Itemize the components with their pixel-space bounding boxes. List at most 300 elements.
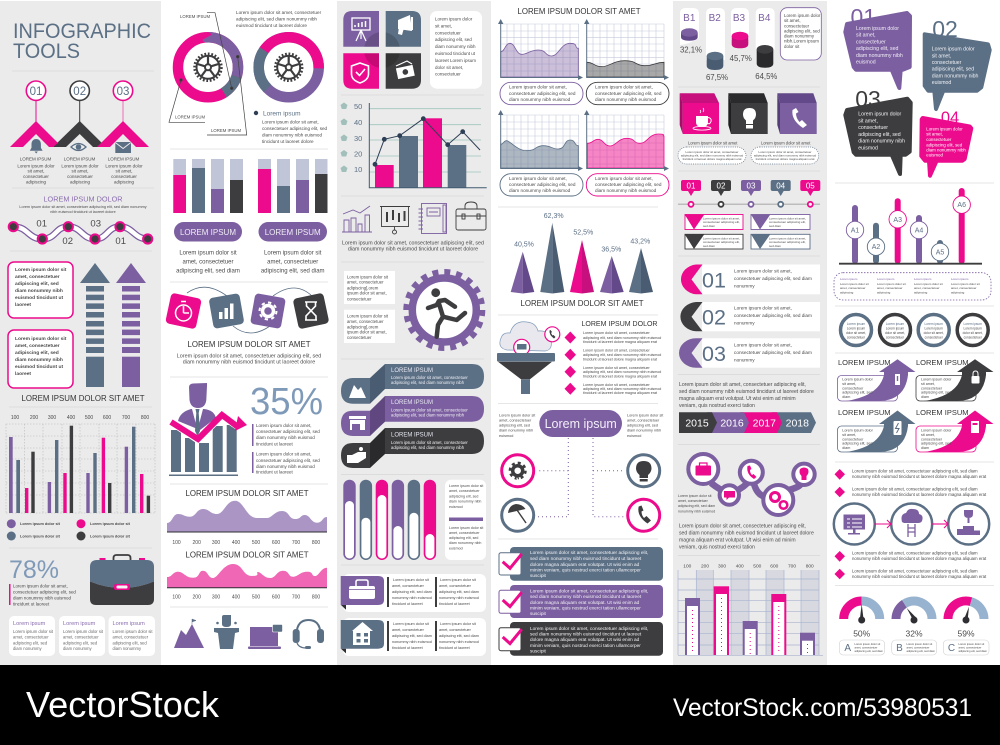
text card: euismod tincidunt ut bbox=[435, 51, 476, 56]
speech bubble 02: sit amet, bbox=[932, 53, 951, 59]
panel: column 2 bbox=[165, 10, 331, 649]
info cards: adipiscing elit, sed bbox=[13, 640, 48, 646]
heading and caption: LOREM IPSUM DOLOR SIT AMET bbox=[188, 340, 311, 349]
cube: bulb bbox=[728, 93, 768, 134]
caption: Lorem ipsum dolor sit amet, consectetuer adipiscing elit, sed bbox=[342, 240, 484, 246]
icon: cloud funnel bbox=[497, 322, 560, 394]
icon circle: bulb bbox=[628, 455, 660, 487]
slider chart: A4 bbox=[915, 228, 923, 234]
text block: veniam, quis nostrud exerci tation bbox=[679, 544, 755, 550]
text rings: consectetuer bbox=[886, 336, 905, 340]
text card: dolor sit amet, bbox=[435, 65, 463, 70]
gauge card C bbox=[943, 640, 989, 655]
funnel list: adipiscing elit, sed diam nonummy nibh euismod bbox=[583, 336, 661, 340]
funnel list: tincidunt ut laoreet dolore magna aliquam erat bbox=[583, 340, 657, 344]
speech bubble 02: Lorem ipsum dolor bbox=[932, 47, 975, 53]
top text block: adipiscing elit, sed diam nonummy nibh bbox=[236, 16, 317, 22]
pyramid chart: 43,2% bbox=[630, 238, 650, 246]
icon circle: umbrella bbox=[502, 499, 534, 531]
bar chart: 100 bbox=[11, 415, 19, 421]
check item: purple bbox=[499, 585, 663, 618]
process flow bbox=[834, 504, 989, 544]
info cards: Lorem ipsum bbox=[112, 621, 145, 627]
caption: diam nonummy nibh euismod tincidunt ut laoreet dolore bbox=[348, 246, 478, 252]
step captions: adipiscing bbox=[114, 179, 135, 184]
combo chart bbox=[340, 102, 487, 188]
tab card: house: adipiscing elit, sed diam bbox=[439, 634, 479, 638]
text card: laoreet Lorem ipsum bbox=[435, 58, 476, 63]
pyramid chart bbox=[511, 213, 653, 294]
column chart on grid: 200 bbox=[701, 564, 709, 570]
info cards: amet, consectetuer bbox=[13, 634, 49, 640]
check item: purple: suscipit bbox=[530, 611, 547, 617]
speech bubble 03: adipiscing elit, sed bbox=[858, 132, 901, 138]
icon: outline briefcase bbox=[456, 202, 486, 230]
callout box 1: adipiscing elit, sed bbox=[15, 281, 59, 287]
chevron item 02: Lorem ipsum dolor sit amet, bbox=[734, 306, 792, 311]
grid chart: pink bbox=[584, 110, 669, 171]
area chart 2: 800 bbox=[312, 594, 320, 600]
area chart 1: 200 bbox=[193, 540, 201, 546]
diamond bullets bottom bbox=[834, 550, 987, 579]
callout box 2: amet, consectetuer bbox=[15, 343, 60, 349]
text card: Lorem ipsum dolor bbox=[435, 16, 473, 22]
vertical pill gauges bbox=[343, 480, 436, 560]
diamond bullets bottom: Lorem ipsum dolor sit amet, consectetuer adipiscing elit, sed diam bbox=[852, 568, 978, 574]
text block: Lorem ipsum dolor sit amet, consectetuer adipiscing elit, bbox=[679, 524, 806, 530]
text block: Lorem ipsum dolor sit amet, consectetuer adipiscing elit, sed diam nonummy bbox=[19, 205, 147, 209]
speech bubble 02: diam nonummy nibh bbox=[932, 73, 979, 79]
footer band: VectorStock.com/53980531 bbox=[673, 694, 972, 722]
pyramid chart: 36,5% bbox=[601, 246, 621, 254]
org diagram text: adipiscing elit, sed bbox=[627, 424, 658, 428]
org diagram text: Lorem ipsum dolor sit bbox=[499, 414, 536, 418]
text rings: Lorem ipsum bbox=[963, 322, 982, 326]
text rings: Lorem ipsum bbox=[924, 322, 943, 326]
chart caption: purple: Lorem ipsum dolor sit amet, bbox=[509, 84, 567, 90]
slider legend: Lorem ipsum dolor sit bbox=[914, 282, 943, 286]
callout box 1: laoreet bbox=[15, 302, 31, 308]
tab card: house: tincidunt ut laoreet bbox=[439, 646, 471, 650]
cylinder chart: B3 bbox=[733, 13, 746, 24]
pill: lorem ipsum: Lorem ipsum bbox=[545, 417, 617, 431]
chevron item 01: 01 bbox=[702, 268, 726, 292]
icon tile: presentation bbox=[343, 11, 379, 47]
info cards: Lorem ipsum bbox=[63, 621, 96, 627]
diamond bullets bottom: nonummy nibh euismod tincidunt ut laoreet dolore magna aliquam erat bbox=[852, 556, 987, 561]
arrow card: sd card: LOREM IPSUM bbox=[916, 408, 969, 417]
gauge card A: amet, consectetuer bbox=[854, 646, 877, 650]
ribbon: dark bbox=[341, 428, 484, 468]
ribbon: slate: Lorem ipsum dolor sit amet, consectetuer bbox=[391, 375, 468, 380]
text rings bbox=[840, 314, 988, 346]
grid chart: slate bbox=[498, 110, 583, 171]
column chart on grid: 100 bbox=[683, 564, 692, 570]
step captions: consectetuer bbox=[111, 174, 137, 179]
wave timeline bbox=[9, 218, 152, 247]
dotted note 1: Lorem ipsum dolor sit amet, consectetuer bbox=[685, 150, 739, 154]
speech bubble 02 bbox=[925, 16, 990, 109]
chart caption: purple: consectetuer adipiscing elit, sed bbox=[509, 91, 576, 96]
check item: purple: Lorem ipsum dolor sit amet, consectetuer adipiscing elit, bbox=[530, 588, 648, 594]
info cards: diam nonummy bbox=[63, 646, 93, 651]
info cards: Lorem ipsum dolor sit bbox=[112, 629, 153, 634]
arrow card: battery: sit amet, bbox=[842, 433, 856, 437]
icon: headset bbox=[293, 620, 324, 649]
cube: phone bbox=[777, 93, 817, 134]
gauge notes card: amet, consectetuer bbox=[449, 489, 480, 493]
icon: laptop bbox=[248, 624, 282, 649]
speech bubble 01: adipiscing elit, sed bbox=[856, 46, 899, 52]
arrow card: battery: LOREM IPSUM bbox=[838, 408, 891, 417]
legend text: diam nonummy nibh euismod bbox=[262, 132, 322, 138]
tab card: toolbox: amet, consectetuer bbox=[392, 584, 425, 588]
panel: column 3 bbox=[340, 11, 487, 656]
gauge card B: B bbox=[896, 643, 903, 654]
step captions: Lorem ipsum dolor bbox=[105, 164, 143, 168]
arrow card: battery: consectetuer bbox=[842, 438, 864, 442]
tab card: toolbox: nonummy nibh euismod bbox=[392, 596, 432, 600]
heading: grid charts: LOREM IPSUM DOLOR SIT AMET bbox=[518, 7, 641, 16]
text box: dolor sit bbox=[784, 44, 800, 49]
speech bubble 01: Lorem ipsum dolor bbox=[856, 26, 899, 32]
check item: purple: sed diam nonummy nibh euismod tincidunt ut laoreet bbox=[530, 594, 642, 600]
org diagram text: diam nonummy nibh bbox=[499, 428, 533, 432]
text note 1 bbox=[344, 271, 395, 304]
icon: gear with runner bbox=[406, 272, 482, 348]
dotted note 1: adipiscing elit, sed diam nonummy nibh euismod bbox=[681, 154, 743, 158]
arrow card: lock: adipiscing elit, sed bbox=[921, 390, 951, 394]
speech bubble 04: euismod bbox=[926, 153, 943, 158]
numbered timeline: 04 bbox=[776, 182, 786, 190]
text box bbox=[780, 8, 821, 60]
text note 1: consectetuer bbox=[347, 296, 372, 302]
tab card: toolbox: tincidunt ut laoreet bbox=[392, 602, 424, 606]
icon circle: phone bbox=[628, 499, 660, 531]
stat description: diam nonummy nibh euismod bbox=[13, 596, 71, 600]
text block: veniam, quis nostrud exerci tation bbox=[679, 403, 755, 409]
chevron item 01: nonummy bbox=[734, 283, 755, 288]
slider legend: Lorem ipsum bbox=[877, 277, 895, 281]
diamond bullets top: Lorem ipsum dolor sit amet, consectetuer adipiscing elit, sed diam bbox=[852, 468, 978, 474]
icon: outline board bbox=[380, 206, 410, 234]
pill captions: Lorem ipsum dolor sit bbox=[264, 250, 322, 256]
speech bubble 04: diam nonummy nibh bbox=[926, 148, 966, 153]
arrow card: battery warning bbox=[838, 358, 916, 401]
stat text blocks: diam nonummy nibh euismod bbox=[256, 464, 315, 469]
area chart 1: 100 bbox=[172, 540, 181, 546]
donut callout lines: LOREM IPSUM bbox=[211, 128, 242, 133]
chevron item 01: Lorem ipsum dolor sit amet, bbox=[734, 269, 792, 274]
cylinder chart: B2 bbox=[709, 13, 721, 24]
stat text blocks: diam nonummy nibh euismod bbox=[256, 435, 315, 440]
arrow card: battery warning: consectetuer bbox=[842, 386, 864, 390]
icon glyphs on tiles bbox=[352, 15, 415, 83]
gauge 50%: 50% bbox=[853, 628, 871, 638]
speech bubble 04: Lorem ipsum dolor bbox=[926, 126, 963, 131]
panel: column 5 bbox=[678, 8, 823, 655]
text rings: dolor sit amet, bbox=[924, 331, 944, 335]
text note 2: Lorem ipsum dolor sit bbox=[347, 314, 389, 318]
wave timeline: 01 bbox=[115, 236, 126, 247]
info cards: diam nonummy bbox=[13, 646, 43, 651]
chevron item 03: nonummy bbox=[734, 357, 755, 362]
speech bubble 04: 04 bbox=[941, 109, 959, 127]
gauge notes card: diam nonummy nibh bbox=[449, 541, 481, 545]
org diagram text bbox=[499, 414, 664, 438]
pill label 2 bbox=[258, 222, 327, 242]
node chain note: Lorem ipsum dolor sit bbox=[678, 494, 711, 498]
area chart 2: 200 bbox=[193, 594, 201, 600]
stat: 78%: 78% bbox=[9, 556, 59, 584]
node chain diagram bbox=[688, 454, 815, 515]
chart caption: pink: diam nonummy nibh euismod bbox=[595, 188, 657, 193]
icon: envelope bbox=[115, 142, 131, 153]
speech bubble 04: adipiscing elit, sed bbox=[926, 142, 963, 147]
panel: column 1 bbox=[6, 20, 155, 656]
icon circle: gear bbox=[502, 455, 534, 487]
arrow card: sd card: Lorem ipsum dolor bbox=[921, 428, 952, 432]
step captions: Lorem ipsum dolor bbox=[17, 164, 55, 168]
gauge card B: adipiscing elit, sed diam bbox=[906, 649, 936, 653]
speech bubble 04: sit amet, bbox=[926, 132, 943, 137]
combo chart: 50 bbox=[354, 102, 362, 111]
chart legend: Lorem ipsum dolor sit bbox=[90, 522, 131, 526]
heading and caption: Lorem ipsum dolor sit amet, consectetuer adipiscing elit, sed bbox=[177, 354, 321, 360]
chart caption: pink: consectetuer adipiscing elit, sed bbox=[595, 182, 662, 187]
ribbon: slate: LOREM IPSUM bbox=[391, 368, 433, 374]
slider legend: amet, consectetuer bbox=[877, 286, 903, 290]
text block: magna aliquam erat volutpat. Ut wisi enim ad minim bbox=[679, 396, 796, 402]
gauge card A: Lorem ipsum dolor sit bbox=[854, 642, 880, 646]
ribbon: purple bbox=[341, 396, 484, 436]
check item: dark: sed diam nonummy nibh euismod tincidunt ut laoreet bbox=[530, 632, 642, 638]
cylinder chart: B1 bbox=[683, 13, 696, 24]
chevron item 02 bbox=[680, 302, 820, 331]
flag notes: consectetuer adipiscing elit, bbox=[769, 220, 806, 224]
bar chart: 600 bbox=[103, 415, 111, 421]
donut chart 2 bbox=[246, 25, 331, 110]
footer band: VectorStock bbox=[26, 684, 220, 725]
stat text blocks bbox=[252, 423, 320, 474]
area chart 2: 400 bbox=[232, 594, 240, 600]
flag notes: Lorem ipsum dolor sit amet, bbox=[769, 236, 806, 240]
text rings: dolor sit amet, bbox=[963, 331, 983, 335]
text box: Lorem ipsum dolor bbox=[784, 13, 821, 18]
tab card: house bbox=[341, 618, 486, 656]
chart caption: slate: diam nonummy nibh euismod bbox=[509, 188, 571, 193]
slider chart: A2 bbox=[872, 244, 880, 251]
text box: adipiscing elit, sed bbox=[784, 28, 820, 33]
funnel list: tincidunt ut laoreet dolore magna aliquam erat bbox=[583, 391, 657, 395]
heading: area chart 1: LOREM IPSUM DOLOR SIT AMET bbox=[186, 489, 309, 498]
flag notes: sed diam bbox=[703, 224, 716, 228]
ribbon: purple: LOREM IPSUM bbox=[391, 400, 433, 406]
text note 2 bbox=[344, 310, 395, 343]
chart legend bbox=[7, 519, 131, 540]
text rings: dolor sit amet, bbox=[846, 331, 866, 335]
info cards: amet, consectetuer bbox=[63, 634, 99, 640]
ribbon: slate bbox=[341, 364, 484, 404]
text block: nibh euismod tincidunt ut laoreet dolore bbox=[50, 210, 116, 214]
arrow card: battery: adipiscing elit, sed bbox=[842, 442, 872, 446]
text block: Lorem ipsum dolor sit amet, consectetuer adipiscing elit, bbox=[679, 382, 806, 388]
icon tile: shield bbox=[343, 53, 379, 89]
numbered timeline: 03 bbox=[747, 182, 756, 190]
combo chart: 10 bbox=[354, 165, 362, 174]
text block: sed diam nonummy nibh euismod tincidunt ut laoreet dolore bbox=[679, 530, 814, 536]
year timeline: 2018 bbox=[786, 418, 809, 430]
pyramid chart: 40,5% bbox=[514, 242, 534, 248]
check item: slate: sed diam nonummy nibh euismod tincidunt ut laoreet bbox=[530, 556, 642, 562]
chart caption: dark: Lorem ipsum dolor sit amet, bbox=[595, 84, 653, 90]
top text block: Lorem ipsum dolor sit amet, consectetuer bbox=[236, 10, 322, 15]
funnel list: tincidunt ut laoreet dolore magna aliquam erat bbox=[583, 374, 657, 378]
panel: column 6 bbox=[834, 4, 994, 655]
slider legend: Lorem ipsum bbox=[951, 277, 969, 281]
callout box 2: diam nonummy nibh bbox=[15, 357, 63, 363]
text rings: consectetuer bbox=[964, 336, 983, 340]
heading: bar chart: LOREM IPSUM DOLOR SIT AMET bbox=[22, 394, 145, 403]
icon: speaker at podium bbox=[214, 615, 239, 649]
slider chart: A3 bbox=[893, 217, 902, 224]
chart legend: Lorem ipsum dolor sit bbox=[20, 534, 61, 538]
heading: lorem ipsum dolor: LOREM IPSUM DOLOR bbox=[43, 194, 123, 204]
speech bubble 01: diam nonummy nibh bbox=[856, 53, 903, 59]
combo chart: 40 bbox=[354, 118, 362, 127]
gauge card C: Lorem ipsum dolor sit bbox=[958, 642, 984, 646]
check item: dark: Lorem ipsum dolor sit amet, consectetuer adipiscing elit, bbox=[530, 626, 648, 632]
speech bubble 02: 02 bbox=[932, 16, 958, 42]
area chart 2: 100 bbox=[172, 594, 181, 600]
step captions: consectetuer bbox=[23, 174, 49, 179]
chevron item 02: nonummy bbox=[734, 320, 755, 325]
org diagram text: euismod bbox=[627, 434, 641, 438]
org diagram text: amet, consectetuer bbox=[499, 418, 532, 422]
area chart 2 bbox=[167, 564, 327, 600]
stat text blocks: Lorem ipsum dolor sit amet, bbox=[256, 452, 312, 456]
cylinder chart: 64,5% bbox=[755, 72, 777, 81]
speech bubble 02: adipiscing elit, sed bbox=[932, 67, 974, 73]
title bbox=[13, 20, 151, 63]
area chart 1: 500 bbox=[252, 540, 260, 546]
chart caption: pink: Lorem ipsum dolor sit amet, bbox=[595, 176, 653, 181]
year timeline: 2017 bbox=[753, 418, 776, 430]
check item: dark: suscipit bbox=[530, 648, 547, 654]
text rings: Lorem ipsum bbox=[886, 322, 905, 326]
combo chart: 20 bbox=[354, 150, 362, 158]
bar chart bbox=[6, 415, 155, 513]
text rings: Lorem ipsum bbox=[886, 326, 905, 330]
check item: dark: minim veniam, quis nostrud exerci tation ullamcorper bbox=[530, 643, 641, 649]
pill captions: adipiscing elit, sed diam bbox=[261, 268, 325, 274]
funnel list: adipiscing elit, sed diam nonummy nibh euismod bbox=[583, 387, 661, 391]
bar chart: 800 bbox=[141, 415, 149, 421]
check item: slate: dolore magna aliquam erat volutpat. Ut wisi enim ad bbox=[530, 562, 640, 568]
stat description: Lorem ipsum dolor sit amet, bbox=[13, 584, 68, 588]
slider legend: Lorem ipsum bbox=[914, 277, 932, 281]
arrow card: battery warning: adipiscing elit, sed bbox=[842, 390, 872, 394]
cylinder chart: 32,1% bbox=[680, 46, 702, 54]
text rings: Lorem ipsum bbox=[924, 326, 943, 330]
gauge notes card: diam nonummy nibh bbox=[449, 499, 481, 503]
slider legend: Lorem ipsum bbox=[840, 277, 858, 281]
pill captions: adipiscing elit, sed diam bbox=[176, 268, 240, 274]
speech bubble 03: Lorem ipsum dolor bbox=[858, 112, 902, 118]
bar chart: 200 bbox=[30, 415, 38, 421]
icon: bell bbox=[30, 139, 43, 154]
ribbon: dark: adipiscing elit, sed diam nonummy nibh bbox=[391, 445, 465, 450]
legend text: tincidunt ut laoreet dolore bbox=[262, 139, 314, 144]
stat text blocks: consectetuer adipiscing elit, sed bbox=[256, 458, 320, 463]
step captions: consectetuer bbox=[67, 174, 93, 179]
numbered roof steps: 02 bbox=[73, 86, 86, 98]
text card: consectetuer bbox=[435, 72, 461, 76]
text rings: consectetuer bbox=[925, 336, 944, 340]
text note 1: amet, consectetuer bbox=[347, 280, 384, 284]
text rings: dolor sit amet, bbox=[885, 331, 905, 335]
funnel list: Lorem ipsum dolor sit amet, consectetuer bbox=[583, 348, 651, 352]
speech bubble 01 bbox=[845, 4, 910, 88]
chart caption: slate: Lorem ipsum dolor sit amet, bbox=[509, 176, 567, 181]
speech bubble 01: consectetuer bbox=[856, 39, 886, 45]
speech bubble 03: sit amet, bbox=[858, 118, 878, 124]
step captions: LOREM IPSUM bbox=[64, 156, 95, 162]
callout box 1: diam nonummy nibh bbox=[15, 288, 63, 294]
diamond bullets top: Lorem ipsum dolor sit amet, consectetuer adipiscing elit, sed diam bbox=[852, 486, 978, 492]
text note 1: ipsum dolor sit amet, bbox=[347, 290, 387, 296]
pyramid chart: 52,5% bbox=[573, 230, 593, 236]
bar chart: 300 bbox=[48, 415, 56, 421]
slider chart bbox=[839, 188, 982, 264]
wave timeline: 03 bbox=[90, 218, 101, 230]
text box: diam nonummy bbox=[784, 34, 815, 38]
gauge notes card bbox=[445, 480, 486, 560]
arrow card: sd card: consectetuer bbox=[921, 438, 943, 442]
chevron item 03 bbox=[679, 338, 820, 368]
area chart 1: 800 bbox=[312, 540, 320, 546]
callout box 2: euismod tincidunt ut bbox=[15, 364, 63, 370]
callout box 1: amet, consectetuer bbox=[15, 274, 60, 280]
text rings: Lorem ipsum bbox=[963, 326, 982, 330]
numbered timeline bbox=[678, 180, 820, 207]
tab card: house: Lorem ipsum dolor sit bbox=[393, 622, 430, 626]
diamond bullets top: nonummy nibh euismod tincidunt ut laoreet dolore magna aliquam erat bbox=[852, 492, 987, 497]
icon: businessman on chart bbox=[169, 383, 247, 476]
check item: purple: dolore magna aliquam erat volutpat. Ut wisi enim ad bbox=[530, 600, 640, 606]
pill captions bbox=[176, 250, 325, 274]
year timeline bbox=[679, 412, 816, 433]
linked icon tiles bbox=[165, 287, 329, 333]
title: TOOLS bbox=[13, 40, 80, 63]
flag notes: Lorem ipsum dolor sit amet, bbox=[769, 216, 806, 220]
flag notes: Lorem ipsum dolor sit amet, bbox=[703, 216, 740, 220]
gauge notes card: euismod bbox=[449, 546, 463, 550]
gauge card B: Lorem ipsum dolor sit bbox=[906, 642, 932, 646]
node chain note: adipiscing elit, sed diam bbox=[678, 504, 715, 508]
heading: area chart 2: LOREM IPSUM DOLOR SIT AMET bbox=[186, 550, 309, 560]
numbered roof steps: 01 bbox=[30, 86, 42, 98]
heading and caption: diam nonummy nibh euismod tincidunt ut laoreet dolore bbox=[183, 360, 315, 366]
info cards: Lorem ipsum dolor sit bbox=[13, 629, 54, 634]
wave timeline: 02 bbox=[62, 236, 73, 247]
callout box 2: laoreet bbox=[15, 371, 31, 377]
org diagram connectors bbox=[538, 438, 625, 517]
gauge 50% bbox=[844, 601, 880, 638]
column chart on grid: 400 bbox=[736, 564, 744, 570]
icon: mountain with flag bbox=[174, 619, 204, 648]
chart legend: Lorem ipsum dolor sit bbox=[90, 534, 131, 538]
